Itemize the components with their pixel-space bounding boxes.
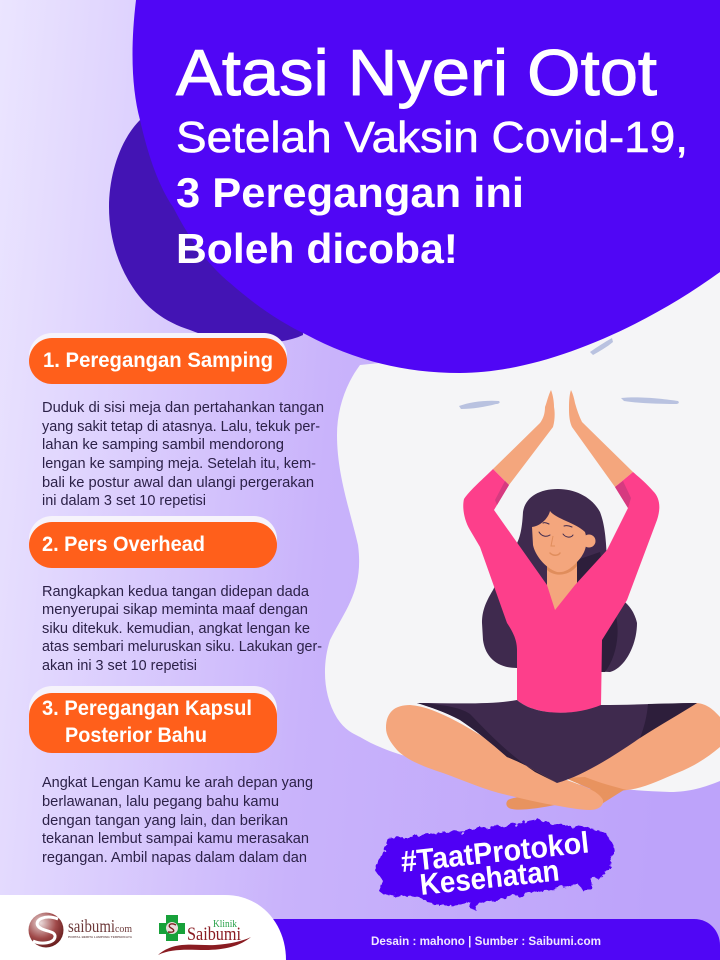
heading: step 2 <box>29 516 277 568</box>
text: step 2: atas sembari meluruskan siku. Lakukan ger- <box>42 639 322 655</box>
logo: klinik saibumi: Klinik <box>213 918 237 930</box>
white blob behind figure <box>325 272 720 792</box>
face <box>532 511 586 572</box>
footer logo panel <box>0 895 286 960</box>
title <box>176 36 688 272</box>
dark foot <box>506 788 627 810</box>
text: step 2: Rangkapkan kedua tangan didepan dada <box>42 584 310 600</box>
text: step 1: lengan ke samping meja. Setelah itu, kem- <box>42 456 316 472</box>
shorts <box>417 700 697 783</box>
sleeve shadows <box>615 481 631 508</box>
text: step 2 <box>42 584 322 674</box>
text: step 1: lahan ke samping sambil mendorong <box>42 437 284 453</box>
top <box>463 469 659 713</box>
logo: klinik saibumi: Saibumi <box>187 924 241 945</box>
text: step 3 <box>42 775 313 866</box>
title: 3 Peregangan ini <box>176 169 524 216</box>
text: step 1: bali ke postur awal dan ulangi pergerakan <box>42 475 314 491</box>
text: step 2: siku ditekuk. kemudian, angkat lengan ke <box>42 621 310 637</box>
hashtag badge: #TaatProtokol <box>399 826 591 879</box>
heading: step 3 <box>29 686 277 753</box>
title: Setelah Vaksin Covid-19, <box>176 113 688 162</box>
illustration: woman doing yoga <box>386 390 720 810</box>
title: Atasi Nyeri Otot <box>176 36 657 109</box>
logo: saibumi: saibumi <box>68 916 115 936</box>
indigo title blob <box>133 0 720 373</box>
heading: step 3: Posterior Bahu <box>65 724 207 747</box>
logo: saibumi <box>28 912 132 948</box>
title: Boleh dicoba! <box>176 225 458 272</box>
text: step 1: ini dalam 3 set 10 repetisi <box>42 493 206 509</box>
footer bar: Desain : mahono | Sumber : Saibumi.com <box>371 934 601 948</box>
brush stroke <box>375 818 613 910</box>
heading: step 2: 2. Pers Overhead <box>42 533 205 556</box>
text: step 3: tekanan lembut sampai kamu merasakan <box>42 831 309 847</box>
face details <box>539 523 573 537</box>
text: step 1 <box>42 400 324 509</box>
forearms and hands <box>493 390 555 485</box>
left leg <box>386 705 603 810</box>
heading: step 1: 1. Peregangan Samping <box>43 349 273 372</box>
text: step 3: dengan tangan yang lain, dan berikan <box>42 813 288 829</box>
heading: step 1 <box>29 333 287 384</box>
text: step 2: menyerupai sikap meminta maaf dengan <box>42 602 308 618</box>
hashtag badge: Kesehatan <box>418 855 561 902</box>
shorts shadows <box>417 703 557 783</box>
dark purple blob <box>109 120 303 343</box>
logo: klinik saibumi <box>158 915 251 955</box>
heading: step 3: 3. Peregangan Kapsul <box>42 697 252 720</box>
text: step 3: Angkat Lengan Kamu ke arah depan yang <box>42 775 313 791</box>
motion streaks <box>459 338 679 409</box>
footer bar <box>270 919 720 960</box>
text: step 2: akan ini 3 set 10 repetisi <box>42 658 197 674</box>
text: step 1: Duduk di sisi meja dan pertahankan tangan <box>42 400 324 416</box>
hair shadow <box>577 552 618 672</box>
logo: saibumi: com <box>115 924 132 935</box>
right leg <box>567 703 720 790</box>
hashtag badge <box>375 818 613 910</box>
text: step 3: regangan. Ambil napas dalam dalam dan <box>42 850 307 866</box>
calf shadow <box>565 777 627 793</box>
text: step 3: berlawanan, lalu pegang bahu kamu <box>42 794 279 810</box>
neck <box>547 560 577 612</box>
text: step 1: yang sakit tetap di atasnya. Lalu, tekuk per- <box>42 419 320 435</box>
ear <box>582 534 596 548</box>
logo: saibumi: PORTAL BERITA LAMPUNG TERPERCAYA <box>68 935 132 939</box>
hair back <box>482 489 637 672</box>
